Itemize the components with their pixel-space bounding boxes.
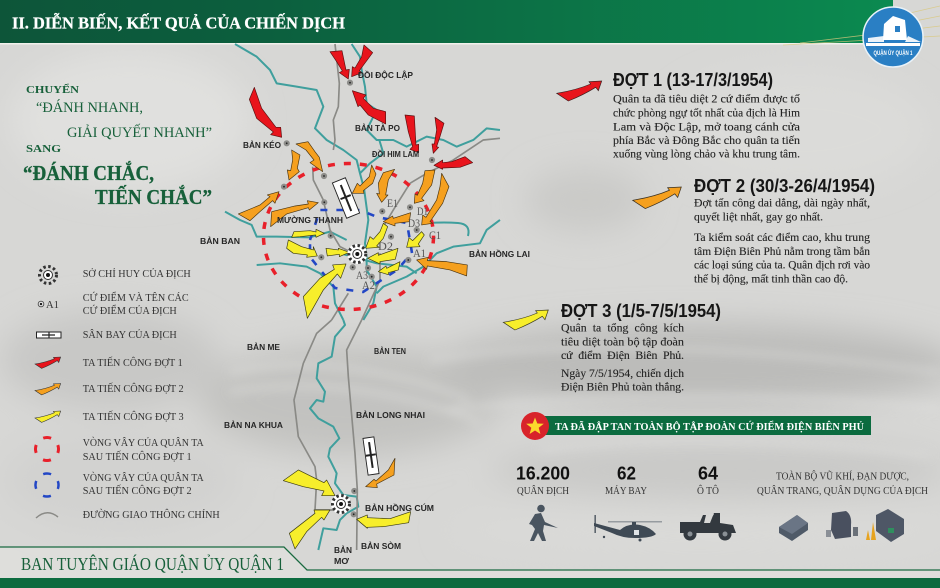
wave 3 description: Ngày 7/5/1954, chiến dịch [561, 366, 684, 380]
stat: aircraft [594, 464, 662, 542]
icon: flag [521, 412, 549, 440]
strongpoint codes: A2 [362, 278, 375, 292]
encirclement ring after wave 2 [310, 210, 412, 292]
legend: wave 2 arrow [35, 382, 184, 395]
legend: command post [40, 266, 191, 284]
strongpoint codes: D2 [378, 239, 393, 253]
wave 1 description: xuống vùng lòng chảo và khu trung tâm. [613, 146, 800, 160]
airfield north [332, 178, 360, 218]
header bar [0, 0, 940, 45]
encirclement ring after wave 1 [264, 164, 434, 310]
icon: red arrow [557, 81, 602, 101]
result banner [521, 412, 871, 440]
place names: ĐỒI ĐỘC LẬP [358, 69, 413, 80]
legend: airfield: SÂN BAY CỦA ĐỊCH [83, 329, 177, 341]
stat: vehicles: 64 [698, 464, 718, 484]
place names: BẢN [334, 544, 352, 555]
strongpoint codes [356, 196, 441, 292]
battle map [200, 44, 530, 566]
wave 3 description: Quân ta tổng công kích [561, 320, 684, 334]
wave 3 description: ĐỢT 3 (1/5-7/5/1954) [561, 301, 721, 321]
icon: backpack [826, 511, 858, 539]
wave 2 description: thế bị động, mất tinh thần cao độ. [694, 272, 848, 286]
strongpoint codes: C1 [429, 228, 441, 242]
airfield south [363, 437, 379, 475]
stat: weapons and supplies: TOÀN BỘ VŨ KHÍ, ĐẠN DƯỢC, [776, 470, 909, 482]
slogan: chuyển phương châm: “ĐÁNH CHẮC, [23, 161, 154, 185]
icon: crate [779, 515, 808, 541]
icon: jeep [680, 513, 736, 540]
wave 3 description: cứ điểm Điện Biên Phủ. [561, 348, 684, 362]
footer: BAN TUYÊN GIÁO QUẬN ỦY QUẬN 1 [21, 553, 284, 574]
stat: weapons and supplies [757, 470, 928, 542]
legend: blue ring [32, 470, 204, 500]
wave 1 description: Quân ta đã tiêu diệt 2 cứ điểm được tố [613, 92, 800, 106]
place names: BẢN BAN [200, 235, 240, 246]
place names: BẢN SÒM [361, 540, 401, 551]
stat: vehicles: Ô TÔ [697, 485, 719, 497]
stat: aircraft: MÁY BAY [605, 485, 647, 497]
wave 2 description: ĐỢT 2 (30/3-26/4/1954) [694, 176, 875, 196]
rivers [225, 44, 500, 550]
legend: red ring [32, 434, 204, 464]
legend: red ring: VÒNG VÂY CỦA QUÂN TA [83, 437, 204, 449]
place names: BẢN NA KHUA [224, 419, 283, 430]
strongpoint codes: E1 [387, 196, 398, 210]
legend: strongpoint: CỨ ĐIỂM CỦA ĐỊCH [83, 304, 177, 317]
legend: airfield [36, 329, 177, 341]
stat: aircraft: 62 [617, 464, 636, 484]
logo: Quận ủy Quận 1 [863, 7, 923, 67]
logo: Quận ủy Quận 1: QUẬN ỦY QUẬN 1 [874, 50, 913, 57]
legend: main road: ĐƯỜNG GIAO THÔNG CHÍNH [83, 509, 220, 521]
place names: BẢN LONG NHAI [356, 409, 425, 420]
attack arrows wave 3 [283, 223, 424, 549]
wave 1 description: ĐỢT 1 (13-17/3/1954) [613, 70, 773, 90]
icon: yellow arrow [503, 310, 548, 330]
place names: BẢN HỒNG LAI [469, 248, 530, 259]
strongpoint codes: A3 [356, 268, 368, 282]
slogan: chuyển phương châm: GIẢI QUYẾT NHANH” [67, 124, 212, 141]
wave 1 description: Lam và Độc Lập, mở toang cánh cửa [613, 120, 801, 134]
stat: vehicles [680, 464, 736, 540]
icon: ammo box [866, 509, 904, 542]
wave 3 description [503, 301, 721, 394]
legend: red ring: SAU TIẾN CÔNG ĐỢT 1 [83, 450, 192, 463]
wave 2 description: Đợt tấn công dai dẳng, dài ngày nhất, [694, 196, 870, 210]
place names: BẢN HỒNG CÚM [365, 502, 434, 513]
slogan: chuyển phương châm: “ĐÁNH NHANH, [36, 99, 143, 116]
place names: MƯỜNG THANH [277, 214, 343, 225]
wave 2 description: tâm Điện Biên Phủ nằm trong tầm bắn [694, 244, 870, 258]
enemy command post, centre [347, 244, 367, 264]
main roads [294, 44, 500, 550]
place names: BẢN TEN [374, 345, 406, 356]
place names: BẢN ME [247, 341, 280, 352]
legend: wave 1 arrow [35, 356, 183, 369]
slogan: chuyển phương châm: SANG [26, 144, 61, 155]
slogan: chuyển phương châm: TIẾN CHẮC” [95, 185, 212, 209]
slogan: chuyển phương châm [23, 83, 212, 209]
icon: orange arrow [633, 187, 681, 209]
wave 1 description [557, 70, 801, 160]
legend: strongpoint: CỨ ĐIỂM VÀ TÊN CÁC [83, 291, 189, 304]
stat: enemy troops: 16.200 [516, 464, 570, 484]
slogan: chuyển phương châm: CHUYỂN [26, 83, 80, 96]
legend: strongpoint [38, 291, 189, 317]
footer [0, 547, 940, 588]
attack arrows wave 2 [238, 142, 467, 488]
enemy command post, south [331, 494, 351, 514]
icon: soldier [529, 505, 558, 541]
strongpoint codes: D1 [417, 204, 428, 218]
legend: wave 3 arrow [35, 410, 184, 423]
legend: wave 1 arrow: TA TIẾN CÔNG ĐỢT 1 [83, 356, 183, 369]
legend [32, 266, 220, 521]
place names: MƠ [334, 556, 350, 566]
legend: wave 3 arrow: TA TIẾN CÔNG ĐỢT 3 [83, 410, 184, 423]
place names: ĐỒI HIM LAM [372, 148, 419, 159]
wave 1 description: phía Bắc và Đông Bắc cho quân ta tiến [613, 133, 800, 147]
wave 2 description: quyết liệt nhất, gay go nhất. [694, 210, 823, 224]
result banner: TA ĐÃ ĐẬP TAN TOÀN BỘ TẬP ĐOÀN CỨ ĐIỂM ĐIỆN BIÊN PHỦ [555, 420, 864, 433]
wave 1 description: chức phòng ngự tốt nhất của địch là Him [613, 106, 800, 120]
place names: BẢN TÀ PO [355, 122, 400, 133]
stat: enemy troops [516, 464, 570, 541]
wave 3 description: tiêu diệt toàn bộ tập đoàn [561, 334, 684, 348]
legend: command post: SỞ CHỈ HUY CỦA ĐỊCH [83, 268, 191, 280]
place names [200, 69, 530, 566]
strongpoints [282, 81, 434, 516]
legend: strongpoint: A1 [46, 299, 59, 311]
title: II. DIỄN BIẾN, KẾT QUẢ CỦA CHIẾN DỊCH [12, 14, 345, 32]
wave 2 description [633, 176, 875, 286]
strongpoint codes: A1 [413, 246, 426, 260]
icon: helicopter [594, 515, 662, 542]
attack arrows wave 1 [249, 45, 473, 169]
stat: enemy troops: QUÂN ĐỊCH [517, 485, 569, 497]
wave 2 description: Ta kiểm soát các điểm cao, khu trung [694, 230, 870, 244]
wave 2 description: các loại súng của ta. Quân địch rơi vào [694, 258, 870, 272]
legend: wave 2 arrow: TA TIẾN CÔNG ĐỢT 2 [83, 382, 184, 395]
legend: blue ring: SAU TIẾN CÔNG ĐỢT 2 [83, 484, 192, 497]
place names: BẢN KÉO [243, 139, 281, 150]
strongpoint codes: D3 [408, 216, 420, 230]
wave 3 description: Điện Biên Phủ toàn thắng. [561, 380, 684, 394]
legend: blue ring: VÒNG VÂY CỦA QUÂN TA [83, 472, 204, 484]
